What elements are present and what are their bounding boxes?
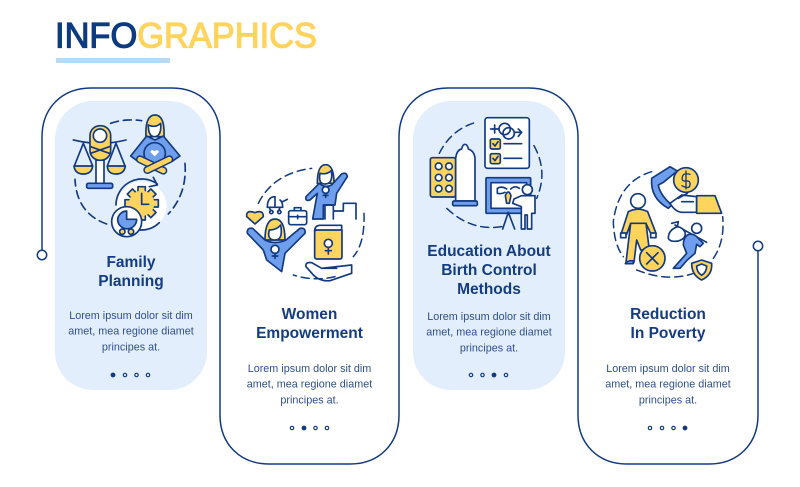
panel: family planning (55, 101, 207, 390)
description: principes at. (639, 394, 697, 406)
description: amet, mea regione diamet (247, 379, 372, 391)
connector line (37, 88, 763, 464)
panel: reduction in poverty (605, 167, 731, 430)
description: Lorem ipsum dolor sit dim (248, 363, 371, 375)
description: Lorem ipsum dolor sit dim (69, 310, 193, 322)
heading: Empowerment (256, 325, 363, 342)
card background (55, 101, 207, 390)
description: amet, mea regione diamet (426, 327, 552, 339)
heading: In Poverty (631, 325, 706, 342)
icon: education about birth control (430, 118, 542, 229)
description: principes at. (102, 341, 160, 353)
description: principes at. (460, 342, 518, 354)
description: amet, mea regione diamet (68, 326, 194, 338)
description: Lorem ipsum dolor sit dim (606, 363, 730, 375)
pagination dots (469, 373, 508, 377)
icon: women empowerment (247, 165, 364, 281)
description: principes at. (280, 394, 339, 406)
icon: reduction in poverty (613, 167, 723, 280)
description: amet, mea regione diamet (605, 379, 731, 391)
panel: education about birth control methods (413, 101, 565, 390)
icon: family planning (73, 115, 185, 237)
heading: Family (106, 254, 156, 271)
heading: Birth Control (441, 262, 537, 279)
panel: women empowerment (247, 165, 372, 430)
title underline (56, 58, 170, 63)
pagination dots (290, 426, 329, 430)
heading: Reduction (630, 306, 706, 323)
pagination dots (648, 426, 687, 430)
card background (413, 101, 565, 390)
heading: Planning (98, 273, 164, 290)
heading: Women (282, 306, 337, 323)
heading: Education About (427, 243, 551, 260)
description: Lorem ipsum dolor sit dim (427, 311, 551, 323)
pagination dots (111, 373, 150, 377)
heading: Methods (457, 281, 521, 298)
title: INFOGRAPHICS (55, 16, 317, 56)
